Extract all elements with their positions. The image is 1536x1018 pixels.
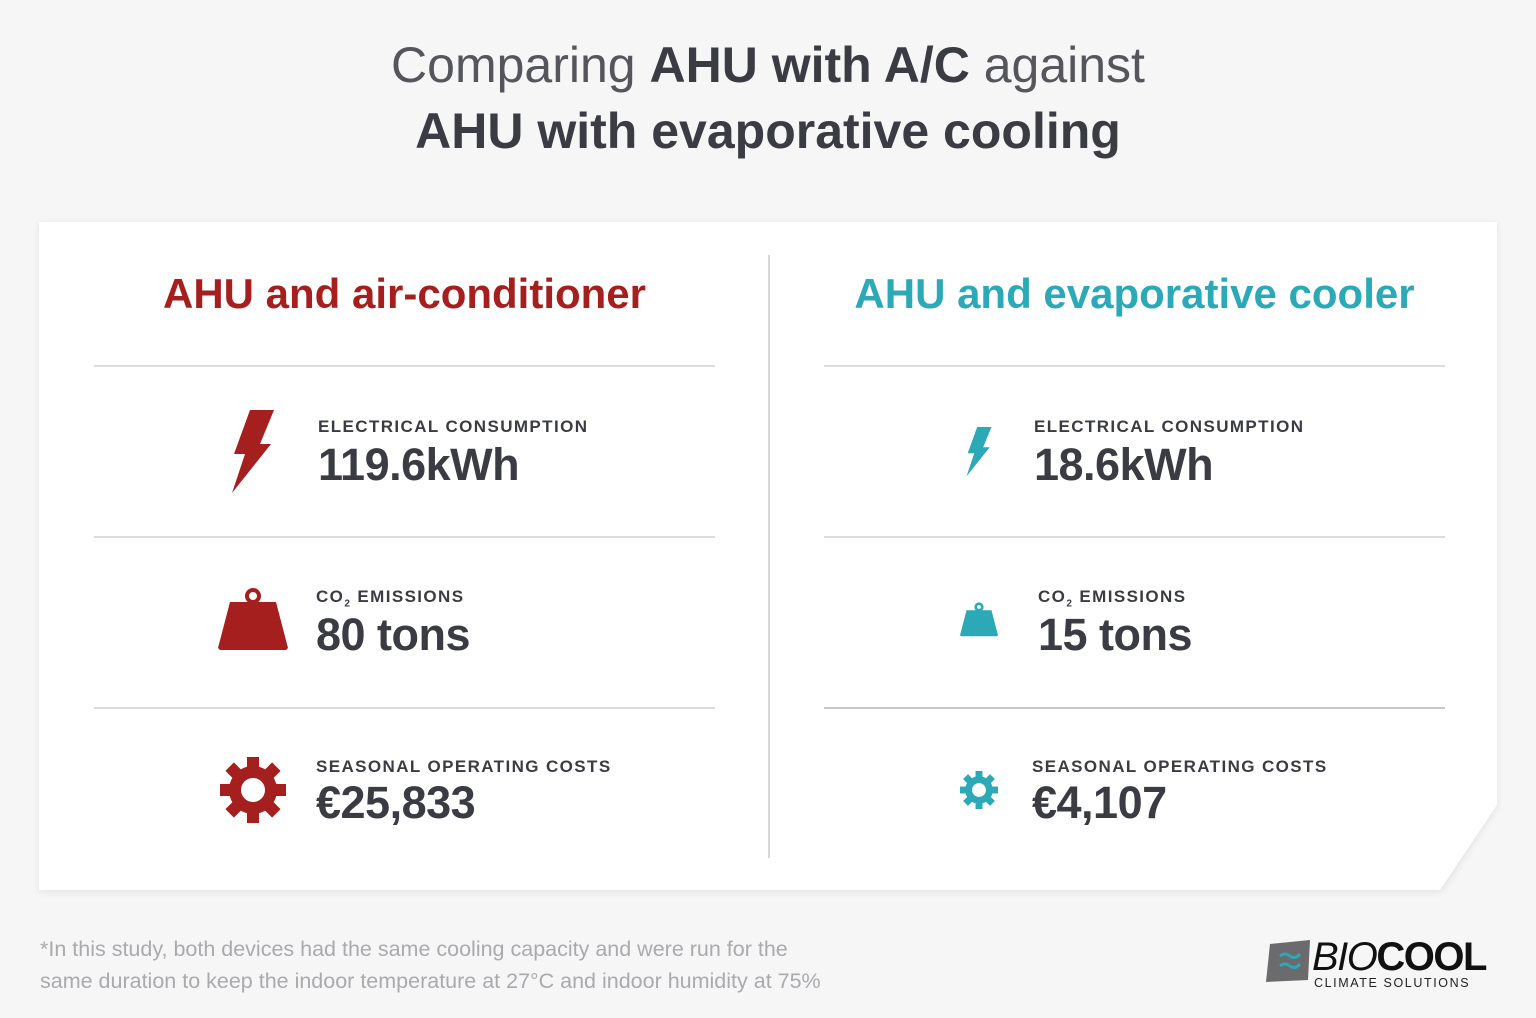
stat: CO2 emissions (316, 587, 470, 660)
logo: BIOCOOL: BIOCOOL (1312, 935, 1486, 979)
stat: electrical consumption: ELECTRICAL CONSUMPTION (1034, 417, 1304, 436)
title (391, 37, 1145, 159)
stat: electrical consumption: 119.6kWh (318, 439, 519, 490)
icon: gear (220, 757, 286, 823)
stat: seasonal operating costs: SEASONAL OPERATING COSTS (1032, 757, 1328, 776)
stat: seasonal operating costs: €4,107 (1032, 777, 1167, 828)
stat: seasonal operating costs: SEASONAL OPERATING COSTS (316, 757, 612, 776)
stat: CO2 emissions (1038, 587, 1192, 660)
icon: lightning (232, 410, 274, 493)
stat: CO2 emissions: CO2 EMISSIONS (1038, 587, 1186, 609)
icon: small gear (960, 771, 998, 809)
stat: electrical consumption (1034, 417, 1304, 490)
footnote: same duration to keep the indoor temperature at 27°C and indoor humidity at 75% (40, 969, 821, 993)
stat: CO2 emissions: 80 tons (316, 609, 470, 660)
footnote: *In this study, both devices had the same cooling capacity and were run for the (40, 937, 788, 961)
stat: CO2 emissions: 15 tons (1038, 609, 1192, 660)
icon: weight (218, 588, 288, 650)
stat: electrical consumption: ELECTRICAL CONSUMPTION (318, 417, 588, 436)
footnote (40, 937, 821, 993)
logo: BIOCOOL: CLIMATE SOLUTIONS (1314, 976, 1470, 990)
panel: air-conditioner (94, 270, 715, 828)
panel: evaporative cooler (824, 270, 1445, 828)
stat: CO2 emissions: CO2 EMISSIONS (316, 587, 464, 609)
stat: seasonal operating costs (1032, 757, 1328, 828)
title: AHU with evaporative cooling (415, 103, 1121, 159)
stat: seasonal operating costs (316, 757, 612, 828)
logo: BIOCOOL (1266, 935, 1486, 990)
heading: AHU and air-conditioner: AHU and air-conditioner (163, 270, 646, 317)
stat: seasonal operating costs: €25,833 (316, 777, 475, 828)
stat: electrical consumption: 18.6kWh (1034, 439, 1213, 490)
stat: electrical consumption (318, 417, 588, 490)
heading: AHU and evaporative cooler: AHU and evaporative cooler (854, 270, 1415, 317)
title: Comparing AHU with A/C against (391, 37, 1145, 93)
icon: logo square (1266, 940, 1310, 982)
icon: small weight (960, 602, 998, 636)
icon: small lightning (966, 427, 992, 476)
